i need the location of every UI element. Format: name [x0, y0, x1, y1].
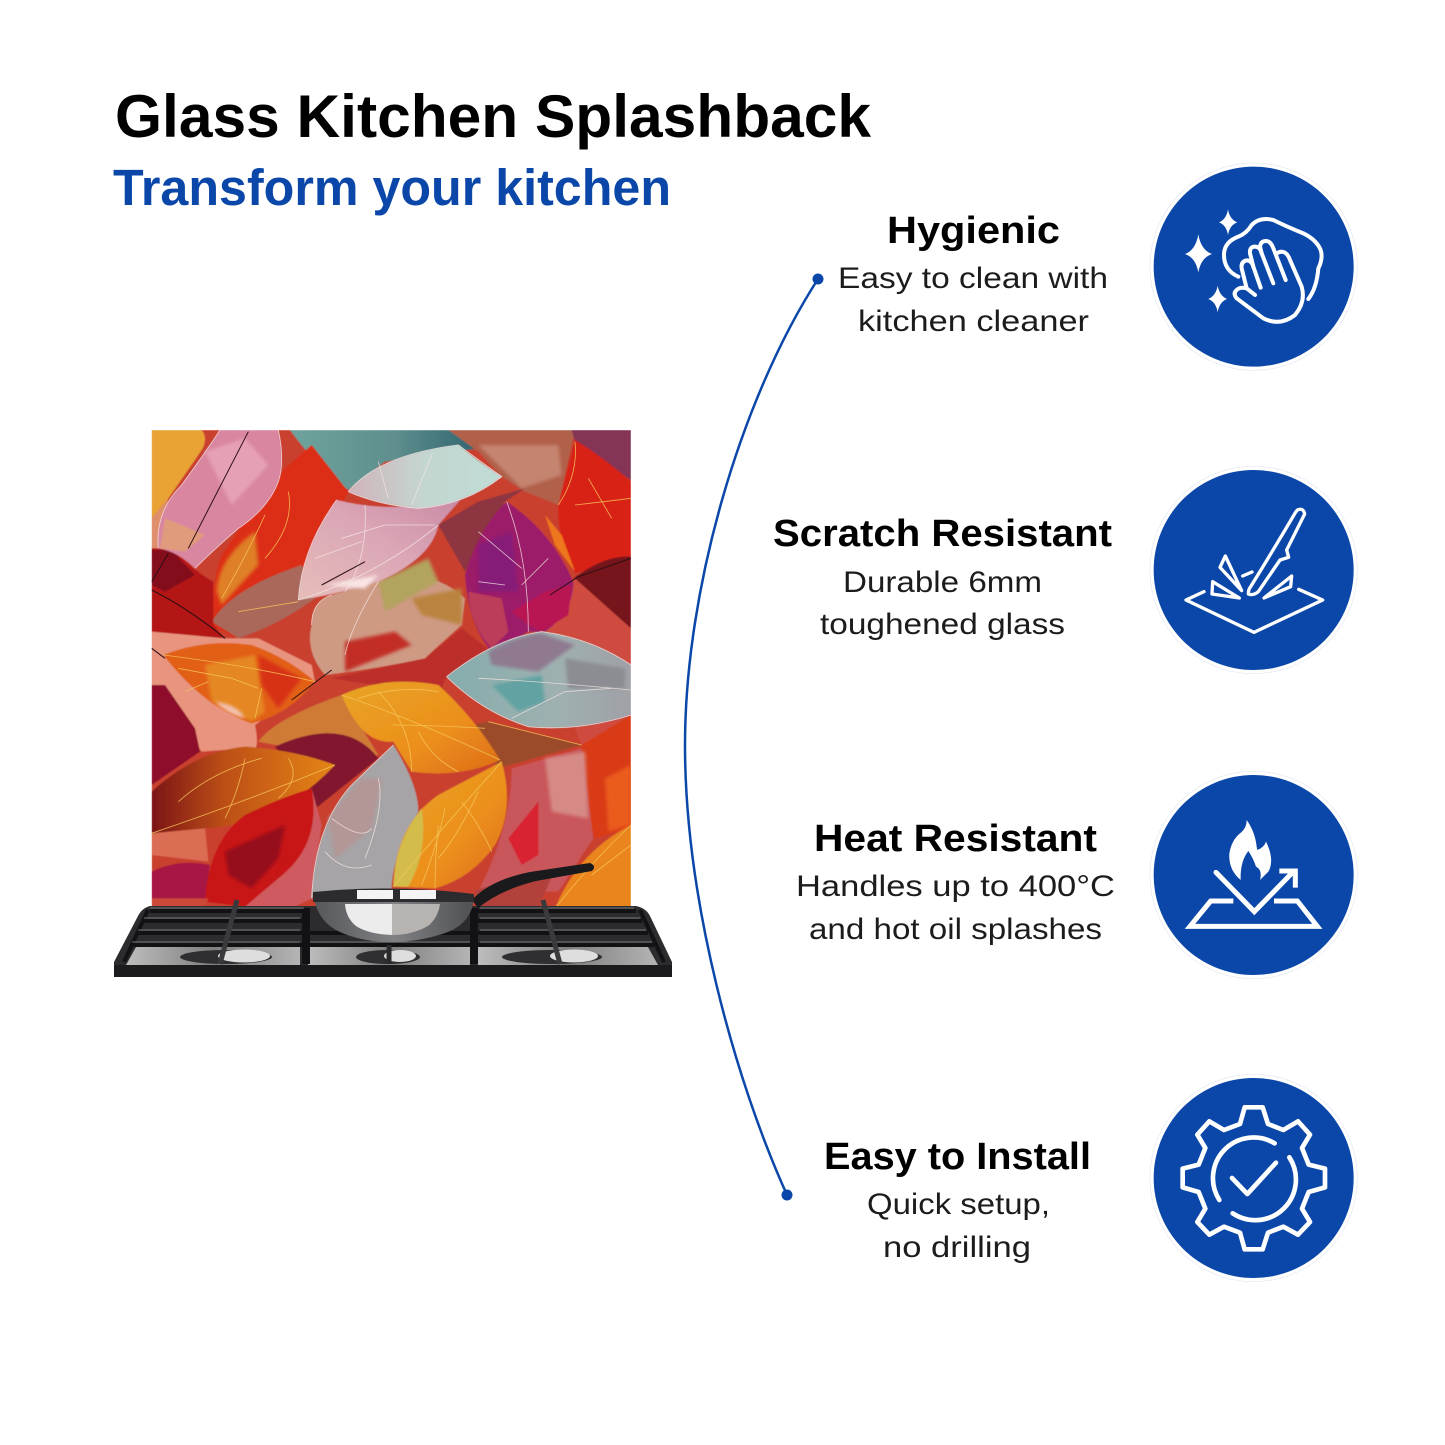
grates [124, 908, 664, 964]
feature: Hygienic: Hygienic [887, 210, 1060, 252]
icon: knife scratching glass [1150, 466, 1357, 674]
burners [180, 950, 602, 964]
pan bowl [314, 898, 474, 942]
splashback panel with leaf artwork [152, 430, 631, 908]
front grate bars [220, 900, 560, 964]
pan rim [313, 888, 474, 902]
feature: Heat Resistant: and hot oil splashes [809, 913, 1102, 946]
feature: Scratch Resistant: Scratch Resistant [773, 513, 1112, 555]
pan highlight shade [392, 904, 440, 935]
icon: gear with checkmark [1150, 1074, 1357, 1282]
hob body [114, 906, 672, 977]
front lip [114, 965, 672, 977]
pan handle [472, 863, 594, 908]
feature: Easy to Install: no drilling [883, 1231, 1031, 1264]
subtitle: Transform your kitchen [113, 159, 671, 216]
top dot [812, 274, 824, 284]
pan highlight light [345, 904, 392, 935]
title: Glass Kitchen Splashback [115, 83, 872, 150]
gas hob with pan [114, 863, 672, 977]
feature: Hygienic [838, 210, 1108, 338]
feature: Scratch Resistant: Durable 6mm [843, 566, 1042, 599]
feature: Heat Resistant [796, 818, 1115, 946]
feature: Scratch Resistant [773, 513, 1112, 641]
icon: flame over surface [1150, 771, 1357, 979]
feature: Heat Resistant: Heat Resistant [814, 818, 1097, 860]
icon: hand wiping with sparkles [1150, 163, 1357, 370]
feature: Easy to Install [824, 1136, 1091, 1264]
feature: Hygienic: Easy to clean with [838, 262, 1108, 295]
feature: Easy to Install: Quick setup, [867, 1188, 1050, 1221]
feature: Easy to Install: Easy to Install [824, 1136, 1091, 1178]
burner trays [126, 947, 300, 965]
feature: Hygienic: kitchen cleaner [858, 305, 1089, 338]
bottom dot [782, 1190, 792, 1200]
feature: Scratch Resistant: toughened glass [820, 608, 1065, 641]
feature: Heat Resistant: Handles up to 400°C [796, 870, 1115, 903]
connector curve [685, 274, 824, 1200]
